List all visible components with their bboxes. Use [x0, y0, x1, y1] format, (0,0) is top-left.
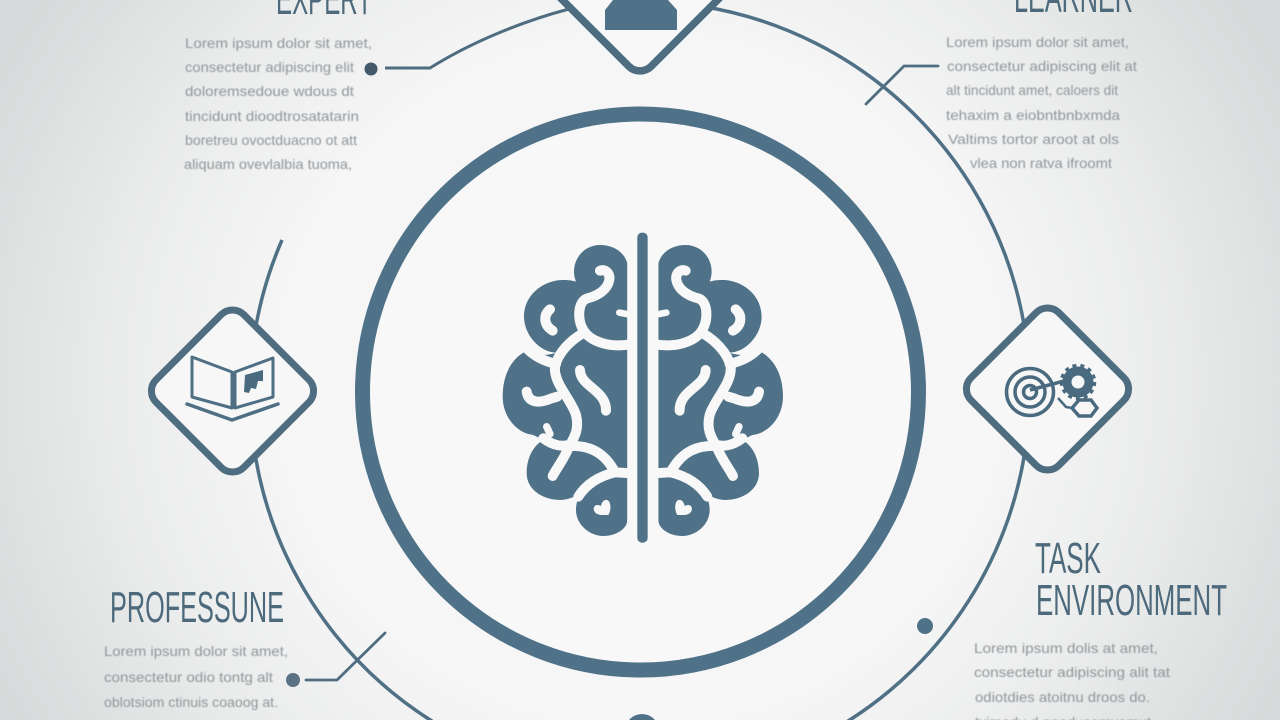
text block: expert	[184, 35, 372, 172]
heading: professional: PROFESSUNE	[110, 583, 284, 632]
text block: learner	[946, 34, 1137, 171]
text block: expert: doloremsedoue wdous dt	[185, 83, 354, 99]
text block: learner: alt tincidunt amet, caloers dit	[946, 82, 1118, 98]
text block: expert: Lorem ipsum dolor sit amet,	[185, 35, 372, 51]
connector: expert	[364, 9, 569, 76]
brain left hemisphere	[503, 245, 632, 543]
callout: learner	[866, 0, 1137, 171]
brain centre bar	[637, 233, 648, 543]
left diamond node: book	[145, 303, 320, 479]
callout: expert	[184, 0, 569, 172]
connector: professional	[286, 633, 385, 687]
icon: expert top	[605, 0, 677, 30]
text block: task environment: Lorem ipsum dolis at amet,	[974, 640, 1158, 656]
text block: expert: boretreu ovoctduacno ot att	[185, 132, 357, 148]
text block: learner: Valtims tortor aroot at ols	[948, 131, 1119, 147]
icon: open book	[187, 357, 278, 420]
text block: learner: consectetur adipiscing elit at	[947, 58, 1137, 74]
central ring	[362, 114, 918, 670]
text block: expert: aliquam ovevlalbia tuoma,	[184, 156, 352, 172]
text block: professional: oblotsiom ctinuis coaoog at.	[104, 694, 278, 710]
text block: learner: tehaxim a eiobntbnbxmda	[946, 107, 1120, 123]
text block: expert: consectetur adipiscing elit	[185, 59, 354, 75]
icon: target and gears	[1006, 366, 1097, 416]
text block: learner: vlea non ratva ifroomt	[970, 155, 1112, 171]
outer ring	[253, 6, 1027, 720]
text block: professional: consectetur odio tontg alt	[104, 669, 273, 685]
brain right hemisphere	[654, 245, 783, 543]
callout: task environment	[917, 534, 1227, 720]
right diamond node: target and gears	[960, 301, 1135, 477]
heading: task environment	[1035, 534, 1227, 625]
connector dot: task environment	[917, 618, 933, 634]
heading: task environment: TASK	[1035, 534, 1101, 583]
icon: brain	[503, 233, 783, 543]
text block: professional: Lorem ipsum dolor sit amet,	[104, 643, 288, 659]
text block: task environment: consectetur adipiscing alit tat	[974, 664, 1170, 680]
text block: learner: Lorem ipsum dolor sit amet,	[946, 34, 1129, 50]
text block: expert: tincidunt dioodtrosatatarin	[185, 108, 359, 124]
top diamond node	[549, 0, 731, 78]
text block: task environment: odiotdies atoitnu droos do.	[975, 689, 1150, 705]
connector: learner	[866, 66, 938, 104]
callout: professional	[104, 583, 385, 710]
text block: task environment	[974, 640, 1170, 720]
bottom node	[625, 714, 659, 720]
text block: professional	[104, 643, 288, 710]
